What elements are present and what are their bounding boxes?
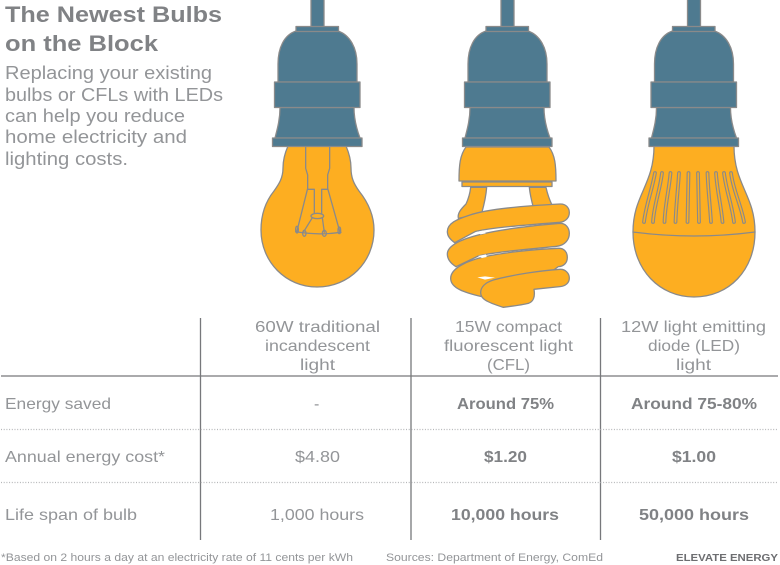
row: annual energy cost (5, 449, 716, 466)
row: energy saved: Around 75% (457, 396, 554, 413)
column header: CFL: 15W compact (455, 319, 563, 336)
intro text: Replacing your existing (5, 62, 212, 83)
row: annual energy cost: $1.00 (672, 449, 716, 466)
brand: Elevate Energy: ELEVATE ENERGY (676, 552, 778, 564)
sources: Sources: Department of Energy, ComEd (386, 552, 603, 564)
column header: incandescent: 60W traditional (255, 319, 380, 336)
row: life span of bulb: 50,000 hours (639, 507, 749, 524)
intro text (5, 62, 223, 169)
footnote: *Based on 2 hours a day at an electricity rate of 11 cents per kWh (1, 552, 353, 564)
column header: incandescent: incandescent (265, 338, 371, 355)
row: annual energy cost: $4.80 (295, 449, 340, 466)
row: energy saved (5, 396, 757, 413)
row: annual energy cost: $1.20 (484, 449, 527, 466)
row: energy saved: - (314, 396, 319, 413)
icon: socket (462, 0, 552, 146)
icon: compact fluorescent bulb (447, 0, 569, 307)
column header: LED: light (676, 357, 712, 374)
column header: LED: 12W light emitting (621, 319, 766, 336)
title (5, 2, 222, 56)
row: life span of bulb: 1,000 hours (270, 507, 364, 524)
icon: incandescent bulb (261, 0, 374, 287)
column header: incandescent (255, 319, 380, 374)
title: The Newest Bulbs (5, 2, 222, 27)
title: on the Block (5, 31, 159, 56)
row: energy saved: Around 75-80% (631, 396, 757, 413)
intro text: bulbs or CFLs with LEDs (5, 84, 223, 105)
icon: LED bulb (633, 0, 755, 297)
icon: socket (272, 0, 362, 146)
column header: LED: diode (LED) (648, 338, 740, 355)
column header: CFL: fluorescent light (444, 338, 574, 355)
icon: socket (649, 0, 738, 146)
comparison table (1, 318, 778, 540)
row: life span of bulb: Life span of bulb (5, 507, 137, 524)
row: energy saved: Energy saved (5, 396, 111, 413)
row: life span of bulb: 10,000 hours (451, 507, 559, 524)
row: annual energy cost: Annual energy cost* (5, 449, 165, 466)
intro text: home electricity and (5, 126, 187, 147)
column header: incandescent: light (300, 357, 336, 374)
column header: CFL: (CFL) (487, 357, 530, 374)
column header: LED (621, 319, 766, 374)
intro text: lighting costs. (5, 148, 128, 169)
column header: CFL (444, 319, 574, 374)
row: life span of bulb (5, 507, 749, 524)
intro text: can help you reduce (5, 105, 185, 126)
